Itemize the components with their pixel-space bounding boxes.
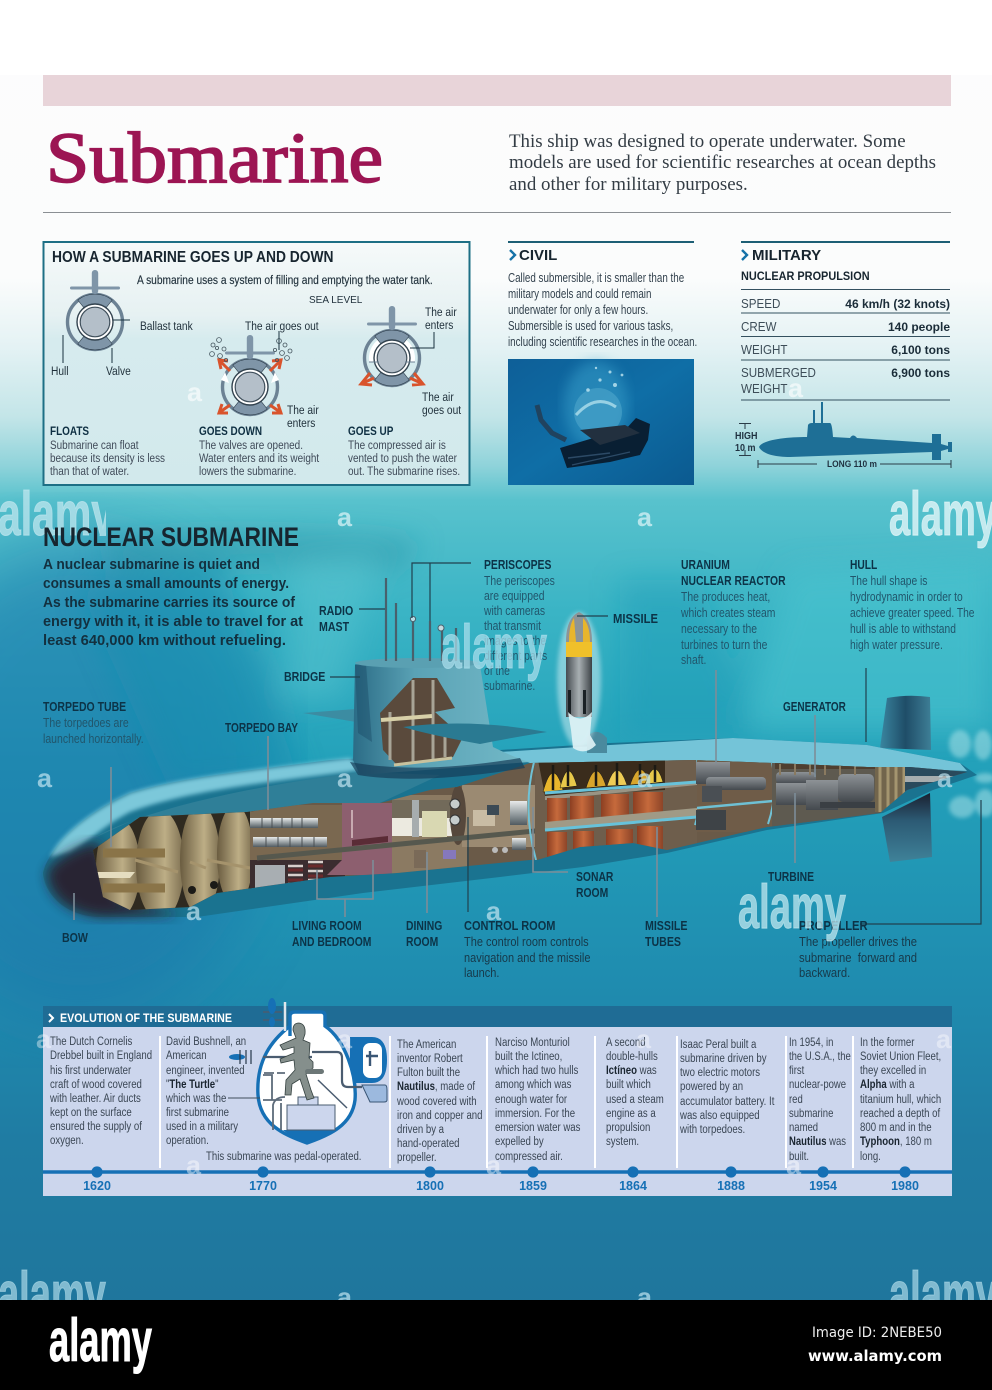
title: Submarine bbox=[46, 118, 383, 198]
icon: submarine silhouette with dimensions: HIGH bbox=[735, 431, 758, 442]
label: periscopes: of the bbox=[484, 665, 510, 678]
label: living room and bedroom: AND BEDROOM bbox=[292, 936, 371, 949]
timeline: 1864 bbox=[619, 1179, 647, 1193]
timeline bbox=[43, 1166, 952, 1193]
specification table: CREW bbox=[741, 320, 777, 334]
label: uranium nuclear reactor: URANIUM bbox=[681, 559, 730, 572]
text: 1864: engine as a bbox=[606, 1107, 656, 1120]
turtle top propeller and snorkel bbox=[284, 1002, 286, 1031]
label: periscopes: submarine. bbox=[484, 680, 535, 693]
text: 1954: In 1954, in bbox=[789, 1036, 833, 1049]
text: 1770: engineer, invented bbox=[166, 1064, 245, 1077]
text: 1888: accumulator battery. It bbox=[680, 1095, 774, 1108]
text: 1859: compressed air. bbox=[495, 1150, 563, 1163]
watermarks: a bbox=[37, 763, 53, 793]
illustration: the turtle bbox=[228, 998, 387, 1143]
sail bbox=[303, 578, 547, 779]
label: dining room: DINING bbox=[406, 920, 442, 933]
text: 1980: Soviet Union Fleet, bbox=[860, 1050, 941, 1063]
text: 1980: Typhoon, 180 m bbox=[860, 1135, 932, 1148]
nuclear submarine intro: least 640,000 km without refueling. bbox=[43, 632, 286, 649]
rudder lower bbox=[882, 793, 932, 862]
timeline: 1770 bbox=[249, 1179, 277, 1193]
label: uranium nuclear reactor: which creates steam bbox=[680, 607, 775, 620]
text: 1620: kept on the surface bbox=[50, 1106, 132, 1119]
text: 1859: Narciso Monturiol bbox=[495, 1036, 570, 1049]
specification table: 140 people bbox=[888, 320, 950, 334]
label: periscopes: different parts bbox=[484, 650, 547, 663]
sea level label: SEA LEVEL bbox=[309, 295, 363, 306]
rudder upper bbox=[880, 696, 931, 750]
text: 1859: which had two hulls bbox=[494, 1064, 578, 1077]
text: 1770: operation. bbox=[166, 1134, 209, 1147]
watermarks: a bbox=[788, 373, 804, 403]
panel heading: HOW A SUBMARINE GOES UP AND DOWN bbox=[52, 248, 334, 266]
watermark behind heading: alamy bbox=[0, 480, 114, 549]
caption: floats: than that of water. bbox=[50, 465, 129, 478]
civil text: military models and could remain bbox=[508, 288, 651, 301]
timeline: 1954 bbox=[809, 1179, 837, 1193]
text: 1864: built which bbox=[606, 1078, 651, 1091]
watermarks: a bbox=[36, 1024, 52, 1054]
text: 1864: Ictíneo was bbox=[606, 1064, 657, 1077]
label: living room and bedroom: LIVING ROOM bbox=[292, 920, 362, 933]
specification table: 6,900 tons bbox=[891, 366, 950, 380]
text: 1954: submarine bbox=[789, 1107, 833, 1120]
watermarks: a bbox=[786, 1150, 802, 1180]
label: bow: BOW bbox=[62, 931, 88, 945]
text: 1620: ensured the supply of bbox=[50, 1120, 142, 1133]
photo: submersible bbox=[508, 359, 694, 485]
caption: floats: FLOATS bbox=[50, 425, 89, 438]
panel: military bbox=[735, 242, 952, 470]
label: periscopes: are equipped bbox=[484, 590, 544, 603]
text: 1888: with torpedoes. bbox=[679, 1123, 745, 1136]
diagram: goes up: enters bbox=[425, 319, 454, 332]
diagram: floats: Ballast tank bbox=[140, 320, 193, 333]
text: 1800: The American bbox=[397, 1038, 456, 1051]
nuclear submarine intro: A nuclear submarine is quiet and bbox=[43, 556, 260, 573]
icon: chevron bbox=[510, 250, 515, 260]
label: propeller: The propeller drives the bbox=[799, 934, 917, 949]
civil text: underwater for only a few hours. bbox=[508, 304, 648, 317]
caption: goes down: Water enters and its weight bbox=[199, 452, 319, 465]
timeline: 1888 bbox=[717, 1179, 745, 1193]
diagram: floats: Valve bbox=[106, 365, 131, 378]
timeline: 1980 bbox=[891, 1179, 919, 1193]
dining room bbox=[392, 795, 467, 875]
text: pedal-operated note: This submarine was pedal-operated. bbox=[206, 1150, 361, 1163]
hull upper band right bbox=[500, 738, 967, 771]
text: 1800: iron and copper and bbox=[397, 1109, 483, 1122]
control room bbox=[450, 785, 536, 853]
living room bbox=[327, 803, 392, 875]
subheading: NUCLEAR PROPULSION bbox=[741, 271, 870, 283]
text: 1954: the U.S.A., the bbox=[789, 1050, 851, 1063]
label: missile: MISSILE bbox=[613, 611, 658, 626]
text: 1888: two electric motors bbox=[680, 1066, 760, 1079]
diagram: goes up: goes out bbox=[422, 404, 462, 417]
hull bbox=[43, 738, 977, 917]
caption: goes up: out. The submarine rises. bbox=[348, 465, 460, 478]
intro text: This ship was designed to operate underwater. Some bbox=[509, 131, 906, 152]
text: 1864: propulsion bbox=[606, 1121, 650, 1134]
diagram: floats: Hull bbox=[51, 365, 69, 378]
reactor compartment bbox=[696, 760, 774, 832]
text: 1980: titanium hull, which bbox=[860, 1093, 941, 1106]
text: 1980: reached a depth of bbox=[860, 1107, 940, 1120]
label: uranium nuclear reactor: The produces heat, bbox=[681, 591, 770, 604]
specification table bbox=[741, 290, 950, 400]
text: 1888: was also equipped bbox=[679, 1109, 760, 1122]
specification table: 6,100 tons bbox=[891, 343, 950, 357]
turtle operator bbox=[280, 1023, 314, 1100]
watermarks: a bbox=[337, 1024, 353, 1054]
text: 1770: used in a military bbox=[166, 1120, 239, 1133]
label: propeller: PROPELLER bbox=[799, 918, 868, 933]
civil text: Submersible is used for various tasks, bbox=[508, 320, 673, 333]
text: 1859: expelled by bbox=[495, 1135, 544, 1148]
timeline: 1620 bbox=[83, 1179, 111, 1193]
icon: chevron bbox=[742, 250, 747, 260]
watermarks: a bbox=[186, 1150, 202, 1180]
text: 1770: which was the bbox=[165, 1092, 226, 1105]
text: 1954: Nautilus was bbox=[789, 1135, 846, 1148]
text: 1954: red bbox=[789, 1093, 803, 1106]
text: 1864: system. bbox=[606, 1135, 639, 1148]
turtle tanks and pipes bbox=[287, 1097, 335, 1130]
watermarks: a bbox=[636, 1024, 652, 1054]
label: periscopes: PERISCOPES bbox=[484, 559, 552, 572]
label: radio mast: MAST bbox=[319, 620, 349, 634]
panel: evolution of the submarine bbox=[43, 998, 952, 1196]
main deck bbox=[257, 830, 545, 858]
turbine compartment bbox=[772, 762, 882, 830]
label: propeller: backward. bbox=[799, 965, 850, 980]
icon: submarine silhouette with dimensions: 10 m bbox=[735, 443, 755, 454]
text: 1620: craft of wood covered bbox=[50, 1078, 142, 1091]
hull nose shadow bbox=[47, 842, 180, 917]
label: radio mast: RADIO bbox=[319, 604, 353, 618]
panel intro: A submarine uses a system of filling and emptying the water tank. bbox=[137, 274, 433, 287]
text: 1980: Alpha with a bbox=[860, 1078, 914, 1091]
text: 1859: enough water for bbox=[495, 1093, 568, 1106]
diagram: goes down bbox=[210, 320, 319, 430]
label: control room: navigation and the missile bbox=[464, 951, 591, 965]
label: torpedo tube: The torpedoes are bbox=[43, 717, 129, 730]
label: hull: The hull shape is bbox=[850, 575, 928, 588]
label: sonar room: ROOM bbox=[576, 887, 608, 900]
watermarks: alamy bbox=[441, 613, 547, 682]
text: 1954: nuclear-powe bbox=[789, 1078, 846, 1091]
watermarks: alamy bbox=[0, 1260, 106, 1329]
text: 1800: Fulton built the bbox=[397, 1066, 460, 1079]
watermarks: a bbox=[637, 1282, 653, 1312]
torpedo bay bbox=[250, 805, 345, 888]
text: 1800: hand-operated bbox=[397, 1137, 460, 1150]
watermarks: a bbox=[937, 763, 953, 793]
cutaway interior bbox=[93, 760, 967, 910]
label: control room: CONTROL ROOM bbox=[464, 919, 556, 933]
text: 1980: they excelled in bbox=[860, 1064, 926, 1077]
diagram: goes up: The air bbox=[422, 391, 454, 404]
timeline: 1859 bbox=[519, 1179, 547, 1193]
diagram: floats bbox=[51, 270, 193, 378]
footer url: www.alamy.com bbox=[808, 1347, 942, 1365]
watermarks: a bbox=[637, 502, 653, 532]
diagram: goes down: The air goes out bbox=[245, 320, 319, 333]
leader lines dark bbox=[330, 563, 981, 924]
watermarks: a bbox=[936, 1024, 952, 1054]
text: 1800: wood covered with bbox=[396, 1095, 477, 1108]
panel: how a submarine goes up and down bbox=[44, 242, 470, 485]
submarine cutaway illustration bbox=[43, 578, 992, 920]
specification table: SUBMERGED bbox=[741, 366, 816, 380]
civil text: Called submersible, it is smaller than the bbox=[508, 272, 684, 285]
nuclear submarine heading: NUCLEAR SUBMARINE bbox=[43, 522, 299, 552]
text: 1864: A second bbox=[606, 1036, 646, 1049]
masts bbox=[386, 578, 456, 661]
label: turbine: TURBINE bbox=[768, 871, 814, 884]
label: hull: achieve greater speed. The bbox=[850, 607, 975, 620]
label: periscopes: images to the bbox=[484, 635, 546, 648]
diagram: goes down: enters bbox=[287, 417, 316, 430]
heading civil: CIVIL bbox=[519, 247, 557, 264]
nuclear submarine intro: As the submarine carries its source of bbox=[43, 594, 296, 611]
left diving plane bbox=[303, 709, 356, 722]
specification table: SPEED bbox=[741, 297, 781, 311]
icon: submarine silhouette with dimensions bbox=[735, 402, 952, 470]
text: 1620: oxygen. bbox=[50, 1134, 84, 1147]
footer bar bbox=[0, 1300, 992, 1390]
civil text: including scientific researches in the ocean. bbox=[508, 336, 697, 349]
label: missile tubes: TUBES bbox=[645, 935, 681, 949]
label: control room: launch. bbox=[464, 966, 499, 980]
watermarks: a bbox=[337, 1282, 353, 1312]
label: bridge: BRIDGE bbox=[284, 670, 326, 684]
label: uranium nuclear reactor: turbines to turn the bbox=[681, 639, 767, 652]
text: 1888: submarine driven by bbox=[680, 1052, 767, 1065]
text: 1888: powered by an bbox=[680, 1080, 743, 1093]
top band bbox=[43, 75, 951, 106]
text: 1859: among which was bbox=[495, 1078, 571, 1091]
text: 1980: In the former bbox=[860, 1036, 915, 1049]
diagram: goes up: The air bbox=[425, 306, 457, 319]
label: uranium nuclear reactor: NUCLEAR REACTOR bbox=[681, 575, 786, 588]
specification table: WEIGHT bbox=[741, 382, 788, 396]
text: 1620: with leather. Air ducts bbox=[49, 1092, 141, 1105]
text: 1770: David Bushnell, an bbox=[166, 1035, 246, 1048]
label: propeller: submarine forward and bbox=[799, 950, 917, 965]
diagram: goes up bbox=[361, 306, 462, 417]
text: 1954: first bbox=[789, 1064, 804, 1077]
panel: civil bbox=[508, 242, 697, 485]
text: 1859: built the Ictineo, bbox=[495, 1050, 562, 1063]
label: sonar room: SONAR bbox=[576, 871, 614, 884]
hull upper band left bbox=[50, 758, 362, 857]
label: periscopes: that transmit bbox=[484, 620, 542, 633]
turtle hull bbox=[258, 1012, 355, 1143]
watermarks: a bbox=[187, 377, 203, 407]
nuclear submarine intro bbox=[43, 556, 303, 649]
specification table: 46 km/h (32 knots) bbox=[845, 297, 950, 311]
label: hull: hydrodynamic in order to bbox=[850, 591, 963, 604]
nuclear submarine intro: consumes a small amounts of energy. bbox=[43, 575, 289, 592]
text: 1620: his first underwater bbox=[50, 1064, 132, 1077]
text: 1800: inventor Robert bbox=[397, 1052, 463, 1065]
hull shaded band left bbox=[90, 772, 440, 840]
text: 1770: American bbox=[166, 1049, 207, 1062]
watermarks: a bbox=[486, 896, 502, 926]
missile launch hatch bbox=[587, 732, 607, 753]
torpedo room bbox=[93, 810, 255, 910]
label: periscopes: with cameras bbox=[483, 605, 545, 618]
text: 1859: immersion. For the bbox=[495, 1107, 575, 1120]
caption: goes down: lowers the submarine. bbox=[199, 465, 296, 478]
watermarks: a bbox=[637, 763, 653, 793]
label: generator: GENERATOR bbox=[783, 701, 846, 714]
watermarks: a bbox=[486, 1150, 502, 1180]
timeline: 1800 bbox=[416, 1179, 444, 1193]
propeller bbox=[949, 730, 992, 818]
missile bbox=[557, 612, 601, 751]
turtle rear compartment bbox=[350, 1037, 387, 1083]
caption: goes down: The valves are opened. bbox=[199, 439, 303, 452]
text: 1888: Isaac Peral built a bbox=[680, 1038, 756, 1051]
caption: goes up: The compressed air is bbox=[348, 439, 446, 452]
text: 1954: named bbox=[789, 1121, 818, 1134]
caption: floats: Submarine can float bbox=[50, 439, 139, 452]
icon: submarine silhouette with dimensions: LONG 110 m bbox=[827, 459, 877, 470]
text: 1859: emersion water was bbox=[495, 1121, 580, 1134]
caption: goes up: vented to push the water bbox=[348, 452, 457, 465]
intro text: models are used for scientific researches at ocean depths bbox=[509, 152, 936, 173]
engine stripes bbox=[875, 766, 973, 812]
caption: floats: because its density is less bbox=[50, 452, 165, 465]
text: 1980: long. bbox=[860, 1150, 881, 1163]
watermarks: a bbox=[186, 896, 202, 926]
watermarks: a bbox=[337, 763, 353, 793]
label: torpedo bay: TORPEDO BAY bbox=[225, 722, 298, 735]
text: 1954: built. bbox=[789, 1150, 809, 1163]
text: 1800: Nautilus, made of bbox=[397, 1080, 475, 1093]
watermarks bbox=[0, 373, 992, 1329]
right diving plane bbox=[403, 723, 547, 744]
text: 1800: driven by a bbox=[397, 1123, 444, 1136]
caption: goes up: GOES UP bbox=[348, 425, 393, 438]
label: hull: HULL bbox=[850, 559, 877, 572]
watermarks: a bbox=[337, 502, 353, 532]
text: 1770: "The Turtle" bbox=[166, 1078, 219, 1091]
label: missile tubes: MISSILE bbox=[645, 919, 688, 933]
label: torpedo tube: TORPEDO TUBE bbox=[43, 701, 126, 714]
text: 1620: The Dutch Cornelis bbox=[50, 1035, 132, 1048]
label: hull: hull is able to withstand bbox=[850, 623, 956, 636]
diagram: goes down: The air bbox=[287, 404, 319, 417]
label: uranium nuclear reactor: shaft. bbox=[681, 654, 706, 667]
label: uranium nuclear reactor: necessary to the bbox=[681, 623, 757, 636]
footer image id: Image ID: 2NEBE50 bbox=[812, 1325, 942, 1341]
text: 1620: Drebbel built in England bbox=[50, 1049, 152, 1062]
watermarks: alamy bbox=[738, 873, 846, 942]
label: torpedo tube: launched horizontally. bbox=[43, 733, 144, 746]
text: 1864: double-hulls bbox=[606, 1050, 658, 1063]
heading military: MILITARY bbox=[752, 247, 821, 264]
footer logo: alamy bbox=[49, 1307, 152, 1374]
label: dining room: ROOM bbox=[406, 936, 438, 949]
text: 1864: used a steam bbox=[606, 1093, 664, 1106]
evolution heading: EVOLUTION OF THE SUBMARINE bbox=[60, 1013, 232, 1025]
nuclear submarine intro: energy with it, it is able to travel for at bbox=[43, 613, 303, 630]
label: control room: The control room controls bbox=[464, 935, 589, 949]
specification table: WEIGHT bbox=[741, 343, 788, 357]
missile compartment bbox=[528, 755, 701, 860]
text: 1770: first submarine bbox=[166, 1106, 229, 1119]
caption: goes down: GOES DOWN bbox=[199, 425, 262, 438]
text: 1800: propeller. bbox=[397, 1151, 437, 1164]
turtle side propeller bbox=[229, 1054, 245, 1060]
leader lines bbox=[74, 670, 815, 920]
intro text: and other for military purposes. bbox=[509, 174, 748, 195]
label: hull: high water pressure. bbox=[850, 639, 943, 652]
sail cutout bbox=[380, 678, 463, 765]
text: 1980: 800 m and in the bbox=[860, 1121, 932, 1134]
label: periscopes: The periscopes bbox=[484, 575, 555, 588]
